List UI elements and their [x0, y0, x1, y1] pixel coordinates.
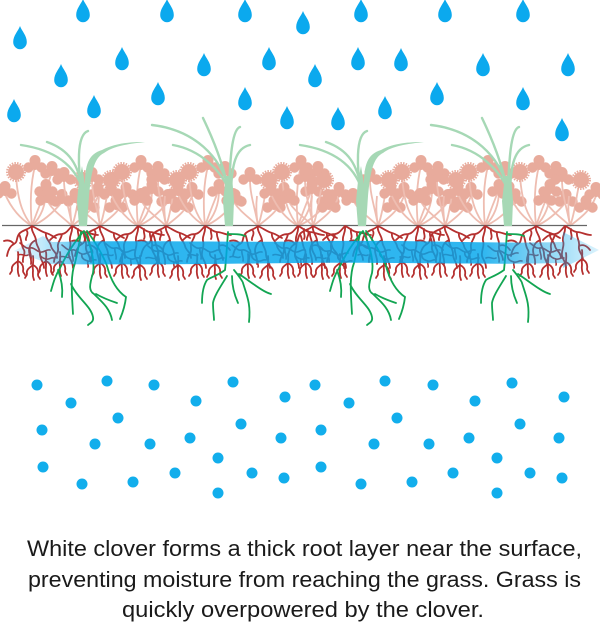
caption: preventing moisture from reaching the grass. Grass is	[28, 567, 581, 592]
caption: quickly overpowered by the clover.	[122, 597, 484, 622]
grass plants with green roots	[21, 118, 550, 325]
white clover plants	[0, 155, 600, 226]
caption	[27, 536, 582, 622]
caption: White clover forms a thick root layer near the surface,	[27, 536, 582, 561]
soil surface line	[2, 224, 587, 226]
rain drops	[7, 0, 575, 141]
moisture arrow blocked by clover roots	[14, 232, 599, 268]
moisture dots in the deep soil	[32, 376, 570, 498]
clover roots	[4, 226, 591, 280]
